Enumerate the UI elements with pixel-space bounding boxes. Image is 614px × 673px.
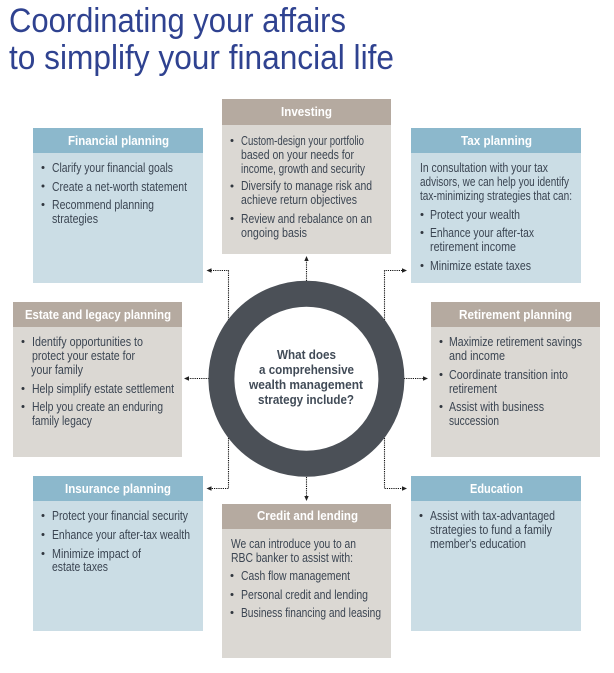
list: education items: strategies to fund a family bbox=[430, 523, 553, 537]
list: insurance items: estate taxes bbox=[52, 560, 108, 574]
list: tax planning items: retirement income bbox=[430, 240, 516, 254]
list: tax planning items: Protect your wealth bbox=[430, 208, 520, 222]
list: insurance items bbox=[42, 509, 190, 574]
list: insurance items: Enhance your after-tax wealth bbox=[52, 528, 190, 542]
list: investing items bbox=[230, 134, 372, 240]
title bbox=[9, 2, 394, 77]
heading: estate and legacy planning: Estate and legacy planning bbox=[25, 307, 171, 322]
title: Coordinating your affairs bbox=[9, 2, 346, 40]
text: tax planning intro: advisors, we can help you identify bbox=[420, 175, 570, 189]
list: tax planning items: Minimize estate taxes bbox=[430, 259, 531, 273]
heading: credit and lending: Credit and lending bbox=[257, 508, 358, 523]
list: insurance items: Protect your financial security bbox=[52, 509, 189, 523]
list: investing items: ongoing basis bbox=[241, 226, 307, 240]
list: financial planning items: Recommend planning bbox=[52, 198, 154, 212]
title: to simplify your financial life bbox=[9, 39, 394, 77]
list: financial planning items bbox=[42, 161, 187, 226]
list: estate and legacy items bbox=[22, 335, 174, 428]
panel: tax planning bbox=[411, 128, 581, 283]
center question: wealth management bbox=[248, 377, 364, 392]
text: credit and lending intro: RBC banker to assist with: bbox=[231, 551, 353, 565]
panel: estate and legacy planning bbox=[13, 302, 182, 457]
arrow: to credit and lending bbox=[304, 477, 309, 501]
list: financial planning items: strategies bbox=[52, 212, 98, 226]
central ring bbox=[221, 294, 391, 464]
panel: investing bbox=[222, 99, 391, 254]
arrow: to estate and legacy planning bbox=[184, 376, 209, 381]
list: estate and legacy items: family legacy bbox=[32, 414, 93, 428]
list: investing items: based on your needs for bbox=[241, 148, 354, 162]
list: investing items: Custom-design your portfolio bbox=[241, 134, 364, 148]
list: education items: member's education bbox=[430, 537, 526, 551]
heading: tax planning: Tax planning bbox=[461, 133, 532, 148]
arrow: to financial planning bbox=[206, 268, 228, 320]
arrow: to investing bbox=[304, 256, 309, 281]
arrow: to insurance planning bbox=[206, 438, 228, 491]
center question bbox=[248, 347, 364, 407]
list: insurance items: Minimize impact of bbox=[52, 547, 141, 561]
list: retirement items: Maximize retirement savings bbox=[449, 335, 582, 349]
list: tax planning items: Enhance your after-tax bbox=[430, 226, 535, 240]
heading: retirement planning: Retirement planning bbox=[459, 307, 572, 322]
list: investing items: Diversify to manage risk and bbox=[241, 179, 372, 193]
list: estate and legacy items: Help you create an enduring bbox=[32, 400, 163, 414]
list: credit and lending items: Personal credit and lending bbox=[241, 588, 368, 602]
list: investing items: achieve return objectives bbox=[241, 193, 357, 207]
center question: a comprehensive bbox=[259, 362, 354, 377]
text: credit and lending intro: We can introduce you to an bbox=[231, 537, 356, 551]
heading: financial planning: Financial planning bbox=[68, 133, 169, 148]
list: credit and lending items bbox=[230, 569, 381, 620]
list: credit and lending items: Cash flow management bbox=[241, 569, 350, 583]
panel: education bbox=[411, 476, 581, 631]
list: education items: Assist with tax-advantaged bbox=[430, 509, 555, 523]
panel: retirement planning bbox=[431, 302, 600, 457]
list: education items bbox=[420, 509, 555, 551]
center question: What does bbox=[277, 347, 336, 362]
list: retirement items bbox=[440, 335, 582, 428]
heading: education: Education bbox=[470, 481, 523, 496]
panel: insurance planning bbox=[33, 476, 203, 631]
list: financial planning items: Create a net-worth statement bbox=[52, 180, 187, 194]
list: estate and legacy items: Help simplify estate settlement bbox=[32, 382, 174, 396]
list: tax planning items bbox=[420, 208, 535, 273]
list: retirement items: retirement bbox=[449, 382, 497, 396]
heading: insurance planning: Insurance planning bbox=[65, 481, 171, 496]
arrow: to education bbox=[384, 438, 407, 491]
arrow: to retirement planning bbox=[404, 376, 428, 381]
center question: strategy include? bbox=[258, 392, 354, 407]
list: estate and legacy items: protect your estate for bbox=[32, 349, 135, 363]
text: tax planning intro: In consultation with your tax bbox=[420, 161, 549, 175]
text: credit and lending intro bbox=[231, 537, 356, 565]
list: retirement items: Assist with business bbox=[449, 400, 544, 414]
list: estate and legacy items: Identify opportunities to bbox=[32, 335, 143, 349]
panel: financial planning bbox=[33, 128, 203, 283]
list: credit and lending items: Business financing and leasing bbox=[241, 606, 381, 620]
list: investing items: Review and rebalance on an bbox=[241, 212, 372, 226]
list: retirement items: succession bbox=[449, 414, 499, 428]
list: financial planning items: Clarify your financial goals bbox=[52, 161, 173, 175]
heading: investing: Investing bbox=[281, 104, 332, 119]
list: investing items: income, growth and security bbox=[241, 162, 366, 176]
list: estate and legacy items: your family bbox=[31, 363, 84, 377]
panel: credit and lending bbox=[222, 504, 391, 658]
list: retirement items: Coordinate transition into bbox=[449, 368, 568, 382]
text: tax planning intro: tax-minimizing strategies that can: bbox=[420, 189, 572, 203]
arrow: to tax planning bbox=[384, 268, 407, 320]
list: retirement items: and income bbox=[449, 349, 505, 363]
text: tax planning intro bbox=[420, 161, 572, 203]
